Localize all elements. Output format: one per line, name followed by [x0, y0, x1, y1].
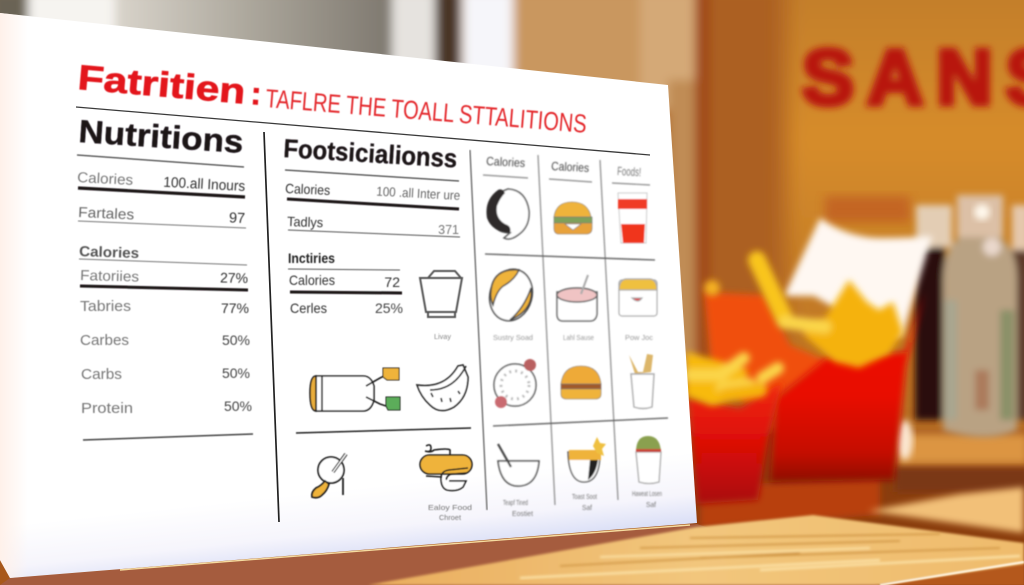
row four labels: Teapf Tined	[503, 500, 528, 507]
panel: nutritions column: Tabries	[80, 299, 131, 315]
icon: yellow striped ball	[484, 264, 538, 326]
icon: lidded cup	[420, 271, 462, 317]
icon: black and white circle	[486, 189, 529, 239]
panel: footsicialionss column: Tadlys	[287, 214, 324, 230]
row four labels: Haweat Losen	[632, 491, 662, 498]
title rule	[76, 107, 650, 155]
icon: half bowl with star	[568, 437, 606, 482]
panel: footsicialionss column: Calories	[289, 272, 335, 288]
row two labels: Lahl Sause	[563, 333, 594, 342]
panel: nutritions column	[77, 113, 253, 440]
panel: nutritions column: Calories	[79, 244, 139, 262]
icon: bowl with spoon	[557, 275, 597, 321]
heading: Footsicialionss: Footsicialionss	[283, 133, 458, 174]
panel: footsicialionss column: Inctiries	[288, 250, 335, 266]
blurred red lettering behind the box	[825, 196, 910, 222]
panel: nutritions column: 27%	[220, 270, 248, 286]
panel: nutritions column: Carbes	[80, 333, 129, 349]
column headers: Calories	[551, 159, 590, 175]
row two labels: Sustry Soad	[493, 333, 533, 342]
panel: footsicialionss column: Calories	[285, 181, 331, 198]
label: Ealoy Food Chroet: Chroet	[439, 513, 462, 522]
panel: nutrition card	[0, 13, 697, 578]
icon: red cup	[618, 193, 647, 243]
row four labels	[503, 491, 662, 518]
title	[76, 58, 588, 139]
panel: nutritions column: 77%	[221, 300, 249, 316]
icon: melon slice	[417, 365, 468, 411]
icon: yellow tube with pipes	[420, 445, 472, 491]
icon: salad cup	[636, 436, 661, 484]
panel: nutritions column: 97	[229, 210, 245, 227]
label: Ealoy Food Chroet: Ealoy Food	[428, 503, 472, 512]
panel: footsicialionss column: 72	[384, 274, 400, 290]
panel: nutritions column: 100.all Inours	[163, 175, 246, 195]
icon: burger top row	[554, 202, 592, 234]
large fries box	[704, 218, 932, 482]
panel: footsicialionss column: 371	[438, 223, 459, 237]
back plank	[868, 487, 1024, 533]
label: Livay: Livay	[434, 334, 452, 341]
column headers: Foods!	[617, 164, 642, 179]
small fries box	[686, 352, 782, 504]
row four labels: Eostiet	[512, 511, 533, 518]
heading: Nutritions: Nutritions	[78, 113, 245, 160]
column headers: Calories	[486, 154, 526, 170]
row two labels	[493, 333, 653, 342]
row four labels: Toast Soot	[572, 494, 597, 501]
icon: fries in cup	[629, 354, 654, 408]
row two labels: Pow Joc	[625, 333, 653, 342]
panel: footsicialionss column	[283, 133, 472, 522]
panel: footsicialionss column: Cerles	[290, 300, 327, 316]
wood grain stripes	[520, 534, 1020, 578]
table surface	[690, 430, 1024, 585]
panel: footsicialionss column: 25%	[375, 300, 403, 316]
glass bottles in background	[915, 195, 1024, 437]
title: :	[250, 75, 263, 112]
foreground wooden planks	[0, 515, 1024, 585]
panel: nutritions column: 50%	[222, 332, 250, 348]
label: Ealoy Food Chroet	[428, 503, 472, 522]
panel: nutritions column: 50%	[224, 398, 252, 414]
title: TAFLRE THE TOALL STTALITIONS	[265, 83, 588, 139]
panel: nutritions column: Fatoriies	[80, 268, 139, 286]
panel: nutritions column: Calories	[77, 170, 134, 189]
panel: nutritions column: Fartales	[78, 205, 134, 223]
panel: nutritions column: Protein	[81, 401, 133, 417]
panel: nutritions column: 50%	[222, 365, 250, 381]
panel: icon grid	[483, 154, 668, 518]
title: Fatritien	[76, 58, 247, 112]
row four labels: Saf	[646, 502, 656, 509]
panel: nutritions column: Carbs	[81, 367, 122, 383]
icon: yellow spoon circle	[312, 454, 346, 498]
icon: bottle with tags	[310, 368, 400, 411]
panel: footsicialionss column: 100 .all Inter ure	[376, 184, 461, 203]
icon: bowl and stick	[498, 444, 539, 486]
icon: plate with garnish	[494, 359, 536, 408]
icon: smiling box	[619, 279, 657, 316]
icon: burger row three	[561, 366, 601, 399]
row four labels: Saf	[582, 505, 592, 512]
column headers	[486, 154, 642, 179]
